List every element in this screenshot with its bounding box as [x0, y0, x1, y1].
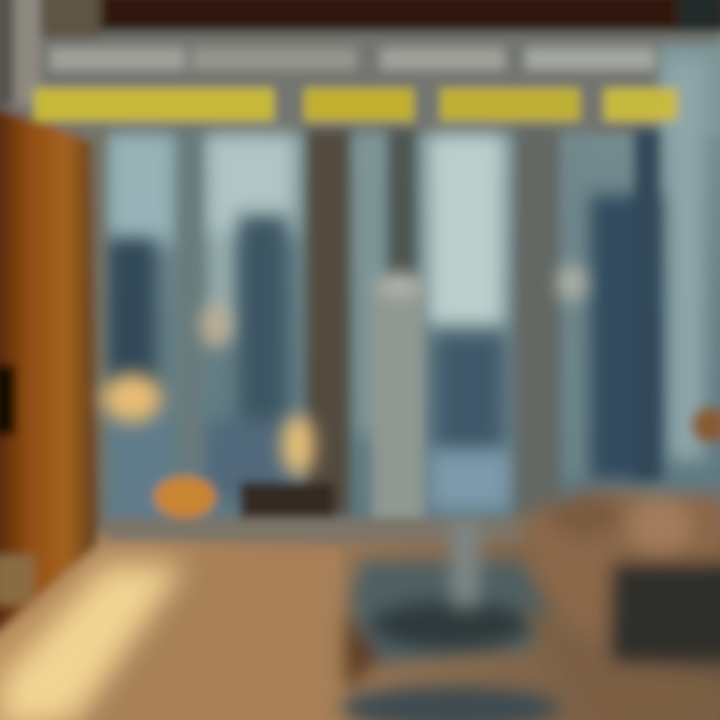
blurred heading: light line: [50, 48, 655, 70]
city skyline towers: [106, 195, 662, 525]
left wood wall: [0, 105, 98, 640]
blurred heading: yellow line: [34, 88, 678, 121]
sofa: [515, 490, 720, 720]
lamps and warm lights: [102, 265, 720, 518]
dark console table: [240, 482, 335, 518]
coffee table and rug: [340, 520, 560, 720]
sunlit floor patch: [0, 565, 185, 720]
window columns and mullions: [92, 130, 660, 530]
ceiling: [0, 0, 720, 105]
upper wall band: [0, 30, 720, 135]
window panes with sky glow: [108, 60, 705, 475]
floor: [0, 518, 720, 720]
